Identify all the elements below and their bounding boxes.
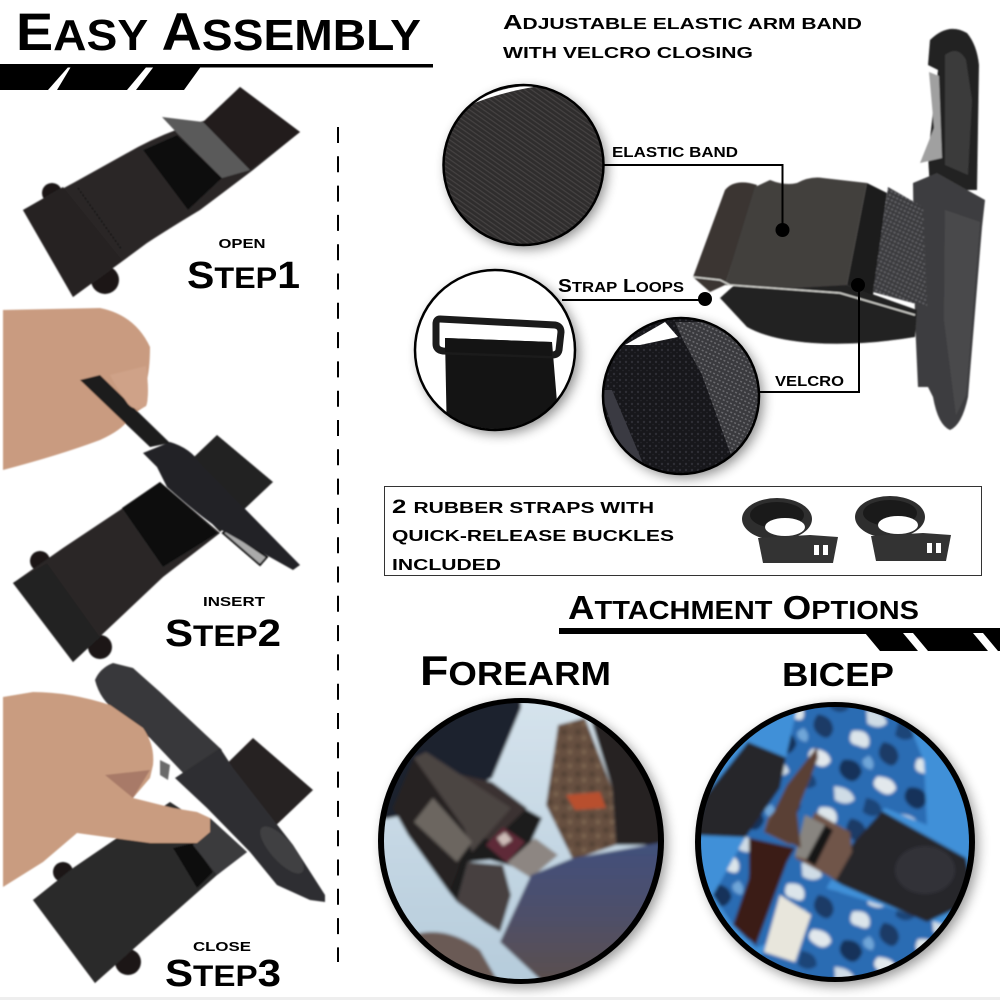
bicep photo circle: [695, 700, 975, 985]
title banner: [0, 64, 433, 90]
knife and band photo: [693, 29, 985, 430]
circle: velcro detail: [600, 318, 765, 480]
label: velcro: [759, 278, 865, 392]
label: elastic band: ELASTIC BAND: [612, 145, 738, 161]
step 3 label: STEP3: [165, 953, 281, 995]
arm band heading: A DJUSTABLE ELASTIC ARM BAND: [503, 12, 862, 34]
step 2 label: [165, 594, 281, 655]
circle: strap loops detail: [415, 270, 575, 440]
step 2 label: INSERT: [203, 594, 265, 609]
shadow: detail circles: [419, 89, 763, 478]
icon: buckle strap 1: [742, 498, 838, 563]
rubber straps box: INCLUDED: [392, 557, 501, 574]
arm band heading: WITH VELCRO CLOSING: [503, 45, 753, 62]
rubber straps box: 2 RUBBER STRAPS WITH: [392, 497, 654, 518]
icon: buckle strap 2: [855, 496, 951, 561]
label: elastic band: [604, 145, 790, 237]
arm band heading: [503, 12, 862, 62]
title: EASY ASSEMBLY: [16, 3, 421, 62]
step 1 label: STEP1: [187, 255, 300, 297]
label: strap loops: STRAP LOOPS: [558, 276, 684, 296]
bottom edge: [0, 997, 1000, 1000]
step 1 label: OPEN: [218, 236, 266, 251]
rubber straps box: QUICK-RELEASE BUCKLES: [392, 528, 674, 545]
step 3 photo: close knife: [3, 663, 325, 983]
attachment options heading: ATTACHMENT OPTIONS: [568, 589, 919, 626]
step 1 label: [187, 236, 300, 297]
step 3 label: CLOSE: [193, 939, 251, 954]
forearm heading: FOREARM: [420, 647, 611, 694]
bicep heading: BICEP: [782, 656, 894, 693]
step 1 photo: open band: [23, 87, 300, 297]
label: velcro: VELCRO: [775, 374, 844, 390]
circle: elastic band detail: [444, 85, 604, 245]
attachment banner: [559, 628, 1000, 651]
forearm photo circle: [378, 698, 670, 985]
step 2 label: STEP2: [165, 613, 281, 655]
label: strap loops: [558, 276, 712, 306]
shadow: photo circles: [383, 702, 978, 988]
rubber straps box: [384, 486, 982, 576]
step 2 photo: insert knife: [3, 308, 300, 662]
